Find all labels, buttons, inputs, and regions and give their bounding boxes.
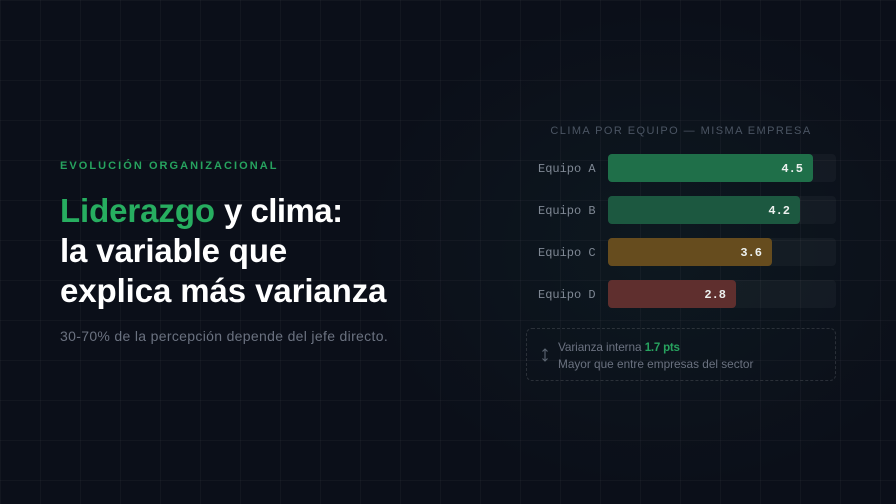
bar: Equipo D — [538, 280, 736, 308]
title: la variable que — [60, 232, 287, 269]
eyebrow label: EVOLUCIÓN ORGANIZACIONAL — [60, 160, 278, 172]
callout text: Varianza interna 1.7 pts — [558, 340, 680, 354]
subtitle: 30-70% de la percepción depende del jefe directo. — [60, 328, 388, 344]
title — [60, 192, 387, 309]
callout text — [558, 340, 754, 371]
bar: Equipo A: Equipo A — [538, 162, 596, 176]
callout text: Mayor que entre empresas del sector — [558, 357, 753, 371]
bar: Equipo C: Equipo C — [538, 246, 596, 260]
bar: Equipo D: Equipo D — [538, 288, 596, 302]
bar: Equipo C: 3.6 — [740, 246, 762, 260]
bar: Equipo B: Equipo B — [538, 204, 596, 218]
callout: internal variance — [526, 328, 836, 381]
bar: Equipo B — [538, 196, 800, 224]
bar: Equipo D: 2.8 — [704, 288, 726, 302]
bar: Equipo B: 4.2 — [768, 204, 790, 218]
icon: vertical double arrow — [542, 348, 548, 362]
title: explica más varianza — [60, 272, 386, 309]
bar: Equipo A — [538, 154, 813, 182]
bar: Equipo C — [538, 238, 772, 266]
title: Liderazgo y clima: — [60, 192, 343, 229]
chart title: CLIMA POR EQUIPO — MISMA EMPRESA — [550, 125, 812, 137]
bar: Equipo A: 4.5 — [781, 162, 803, 176]
